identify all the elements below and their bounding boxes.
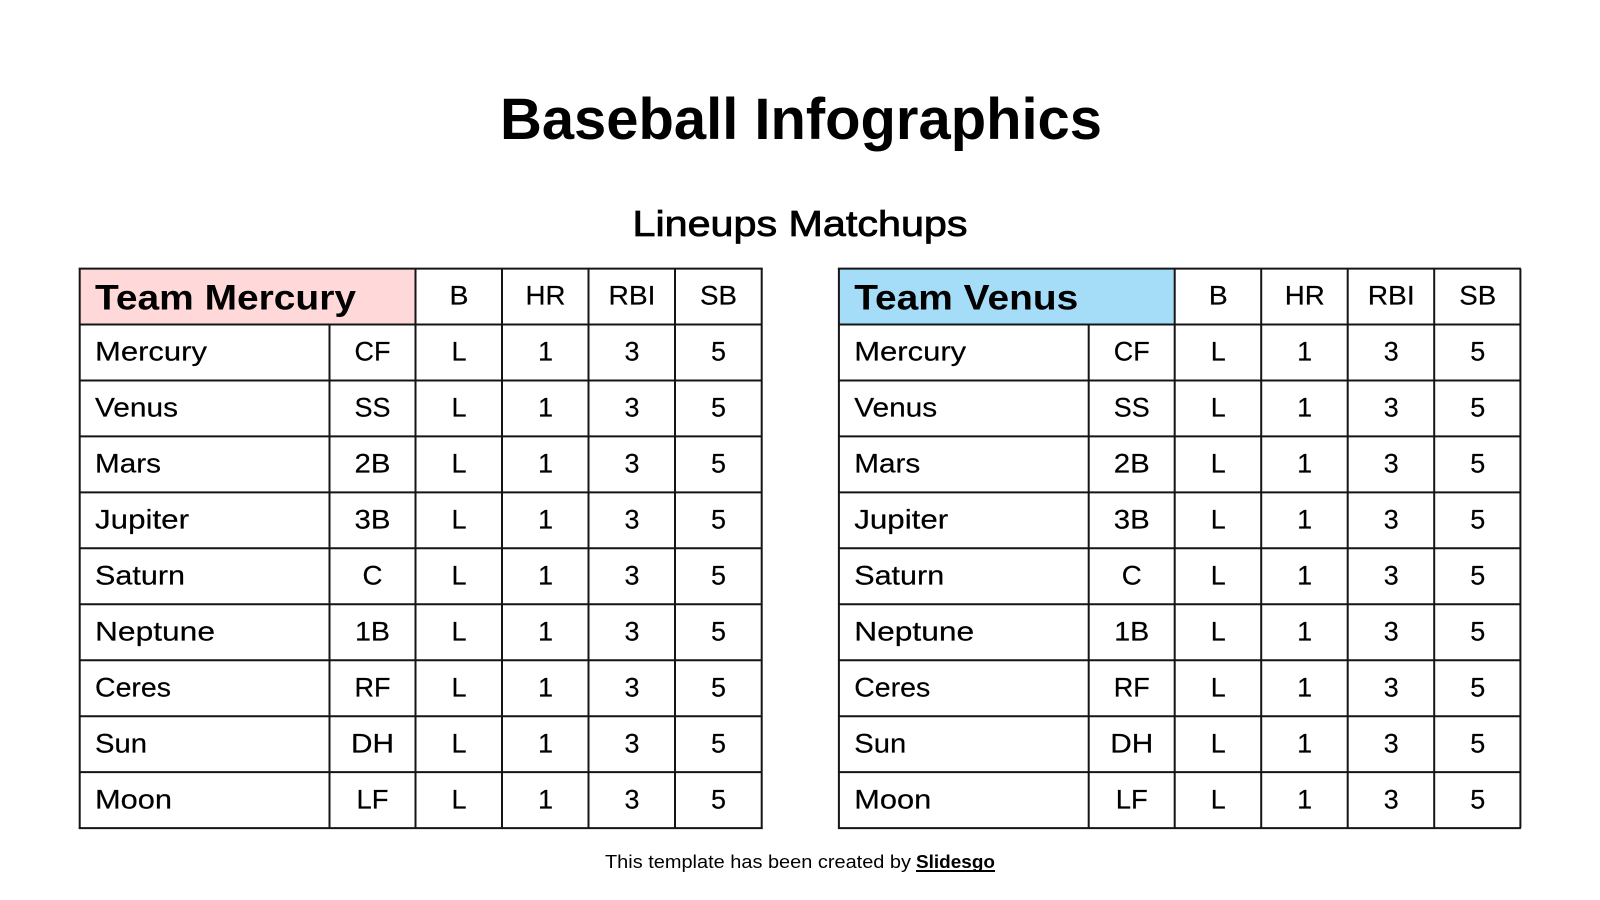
- row: Jupiter: Jupiter: [95, 504, 189, 534]
- row: Mercury: Mercury: [95, 336, 208, 366]
- row: Ceres: 3: [624, 673, 640, 703]
- row: Sun: L: [1211, 729, 1226, 759]
- row: Venus: [95, 392, 726, 422]
- row: Neptune: 1B: [355, 616, 390, 646]
- row: Ceres: 5: [1470, 673, 1485, 703]
- row: Mars: L: [1211, 448, 1226, 478]
- row: Jupiter: L: [1211, 504, 1226, 534]
- row: Jupiter: 1: [1297, 504, 1312, 534]
- row: Ceres: 1: [538, 673, 553, 703]
- row: Neptune: 1B: [1114, 616, 1149, 646]
- row: Ceres: RF: [1114, 673, 1150, 703]
- column headers: B: [1209, 280, 1228, 310]
- row: Jupiter: 5: [711, 504, 726, 534]
- row: Mars: 1: [538, 448, 553, 478]
- row: Moon: L: [452, 785, 466, 815]
- row: Ceres: [854, 673, 1485, 703]
- row: Moon: 5: [1470, 785, 1485, 815]
- row: Mars: 3: [624, 448, 640, 478]
- row: Neptune: L: [1211, 616, 1226, 646]
- row: Saturn: L: [452, 560, 466, 590]
- row: Ceres: 3: [1384, 673, 1399, 703]
- column headers: [450, 280, 737, 310]
- row: Jupiter: 3B: [1114, 504, 1150, 534]
- row: Venus: SS: [354, 392, 390, 422]
- row: Neptune: [854, 616, 1485, 646]
- row: Moon: Moon: [854, 785, 931, 815]
- row: Sun: 3: [624, 729, 640, 759]
- row: Mercury: [854, 336, 1485, 366]
- row: Ceres: L: [1211, 673, 1226, 703]
- row: Saturn: 3: [624, 560, 640, 590]
- row: Mars: Mars: [95, 448, 161, 478]
- column headers: [1209, 280, 1496, 310]
- row: Jupiter: [854, 504, 1485, 534]
- row: Mercury: 3: [1384, 336, 1399, 366]
- row: Neptune: 5: [711, 616, 726, 646]
- row: Saturn: C: [362, 560, 382, 590]
- row: Jupiter: L: [452, 504, 466, 534]
- row: Sun: 5: [711, 729, 726, 759]
- row: Sun: [95, 729, 726, 759]
- row: Mars: 2B: [354, 448, 390, 478]
- row: Ceres: Ceres: [854, 673, 930, 703]
- title: Baseball Infographics: [500, 87, 1102, 152]
- column headers: SB: [1459, 280, 1496, 310]
- row: Mars: [854, 448, 1485, 478]
- team header cell: Team Venus: Team Venus: [854, 278, 1078, 318]
- row: Saturn: 1: [538, 560, 553, 590]
- team header cell: Team Venus: [839, 269, 1175, 324]
- team header cell: Team Mercury: [80, 269, 416, 324]
- row: Neptune: 1: [1297, 616, 1312, 646]
- row: Mars: Mars: [854, 448, 920, 478]
- row: Ceres: 1: [1297, 673, 1312, 703]
- row: Saturn: C: [1122, 560, 1142, 590]
- row: Neptune: Neptune: [95, 616, 215, 646]
- row: Ceres: [95, 673, 726, 703]
- row: Mercury: L: [1211, 336, 1226, 366]
- row: Ceres: L: [452, 673, 466, 703]
- row: Mercury: Mercury: [854, 336, 967, 366]
- row: Sun: DH: [1110, 729, 1153, 759]
- row: Moon: 3: [1384, 785, 1399, 815]
- row: Sun: 1: [1297, 729, 1312, 759]
- row: Venus: L: [452, 392, 466, 422]
- row: Mars: 5: [711, 448, 726, 478]
- row: Mars: 5: [1470, 448, 1485, 478]
- row: Saturn: [95, 560, 726, 590]
- row: Mars: 1: [1297, 448, 1312, 478]
- row: Venus: Venus: [95, 392, 178, 422]
- row: Venus: 5: [711, 392, 726, 422]
- row: Mars: 3: [1384, 448, 1399, 478]
- column headers: SB: [700, 280, 737, 310]
- row: Moon: L: [1211, 785, 1226, 815]
- row: Neptune: Neptune: [854, 616, 974, 646]
- team header cell: Team Mercury: Team Mercury: [95, 278, 357, 318]
- row: Mercury: [95, 336, 726, 366]
- row: Mercury: 1: [538, 336, 553, 366]
- row: Jupiter: 3: [1384, 504, 1399, 534]
- row: Jupiter: Jupiter: [854, 504, 948, 534]
- row: Saturn: Saturn: [854, 560, 944, 590]
- row: Mercury: 1: [1297, 336, 1312, 366]
- row: Moon: LF: [1116, 785, 1148, 815]
- row: Moon: [854, 785, 1485, 815]
- row: Venus: Venus: [854, 392, 937, 422]
- row: Moon: 1: [1297, 785, 1312, 815]
- row: Sun: DH: [351, 729, 394, 759]
- row: Saturn: 5: [711, 560, 726, 590]
- row: Sun: [854, 729, 1485, 759]
- row: Mercury: CF: [1114, 336, 1150, 366]
- column headers: RBI: [1368, 280, 1415, 310]
- row: Sun: Sun: [854, 729, 906, 759]
- row: Ceres: Ceres: [95, 673, 171, 703]
- row: Sun: 5: [1470, 729, 1485, 759]
- row: Mercury: L: [452, 336, 466, 366]
- row: Venus: [854, 392, 1485, 422]
- row: Sun: 3: [1384, 729, 1399, 759]
- row: Venus: 1: [1297, 392, 1312, 422]
- row: Venus: 5: [1470, 392, 1485, 422]
- row: Venus: L: [1211, 392, 1226, 422]
- row: Mars: 2B: [1114, 448, 1150, 478]
- footer credit: This template has been created by: [605, 851, 912, 872]
- row: Saturn: 1: [1297, 560, 1312, 590]
- grid lines: [79, 269, 763, 828]
- row: Jupiter: 3: [624, 504, 640, 534]
- row: Saturn: L: [1211, 560, 1226, 590]
- row: Sun: Sun: [95, 729, 147, 759]
- row: Mars: [95, 448, 726, 478]
- row: Moon: [95, 785, 726, 815]
- row: Mercury: 5: [711, 336, 726, 366]
- row: Neptune: [95, 616, 726, 646]
- row: Mars: L: [452, 448, 466, 478]
- row: Venus: 3: [624, 392, 640, 422]
- row: Mercury: 5: [1470, 336, 1485, 366]
- column headers: RBI: [608, 280, 656, 310]
- column headers: HR: [526, 280, 566, 310]
- row: Neptune: 1: [538, 616, 553, 646]
- row: Neptune: 3: [624, 616, 640, 646]
- column headers: HR: [1285, 280, 1325, 310]
- row: Moon: 3: [624, 785, 640, 815]
- row: Neptune: L: [452, 616, 466, 646]
- column headers: B: [450, 280, 468, 310]
- table: Team Venus: [838, 269, 1521, 828]
- row: Mercury: CF: [354, 336, 390, 366]
- row: Ceres: RF: [354, 673, 390, 703]
- row: Moon: Moon: [95, 785, 172, 815]
- grid lines: [838, 269, 1521, 828]
- row: Saturn: 5: [1470, 560, 1485, 590]
- row: Sun: L: [452, 729, 466, 759]
- row: Neptune: 5: [1470, 616, 1485, 646]
- footer credit: Slidesgo: [916, 851, 995, 872]
- row: Mercury: 3: [624, 336, 640, 366]
- row: Venus: 1: [538, 392, 553, 422]
- row: Moon: 1: [538, 785, 553, 815]
- row: Venus: SS: [1114, 392, 1150, 422]
- row: Sun: 1: [538, 729, 553, 759]
- subtitle: Lineups Matchups: [632, 203, 968, 244]
- row: Moon: 5: [711, 785, 726, 815]
- row: Jupiter: 3B: [354, 504, 390, 534]
- row: Jupiter: 5: [1470, 504, 1485, 534]
- row: Saturn: 3: [1384, 560, 1399, 590]
- table: Team Mercury: [79, 269, 763, 828]
- row: Saturn: [854, 560, 1485, 590]
- row: Ceres: 5: [711, 673, 726, 703]
- row: Jupiter: 1: [538, 504, 553, 534]
- row: Saturn: Saturn: [95, 560, 185, 590]
- row: Venus: 3: [1384, 392, 1399, 422]
- row: Moon: LF: [356, 785, 388, 815]
- row: Neptune: 3: [1384, 616, 1399, 646]
- row: Jupiter: [95, 504, 726, 534]
